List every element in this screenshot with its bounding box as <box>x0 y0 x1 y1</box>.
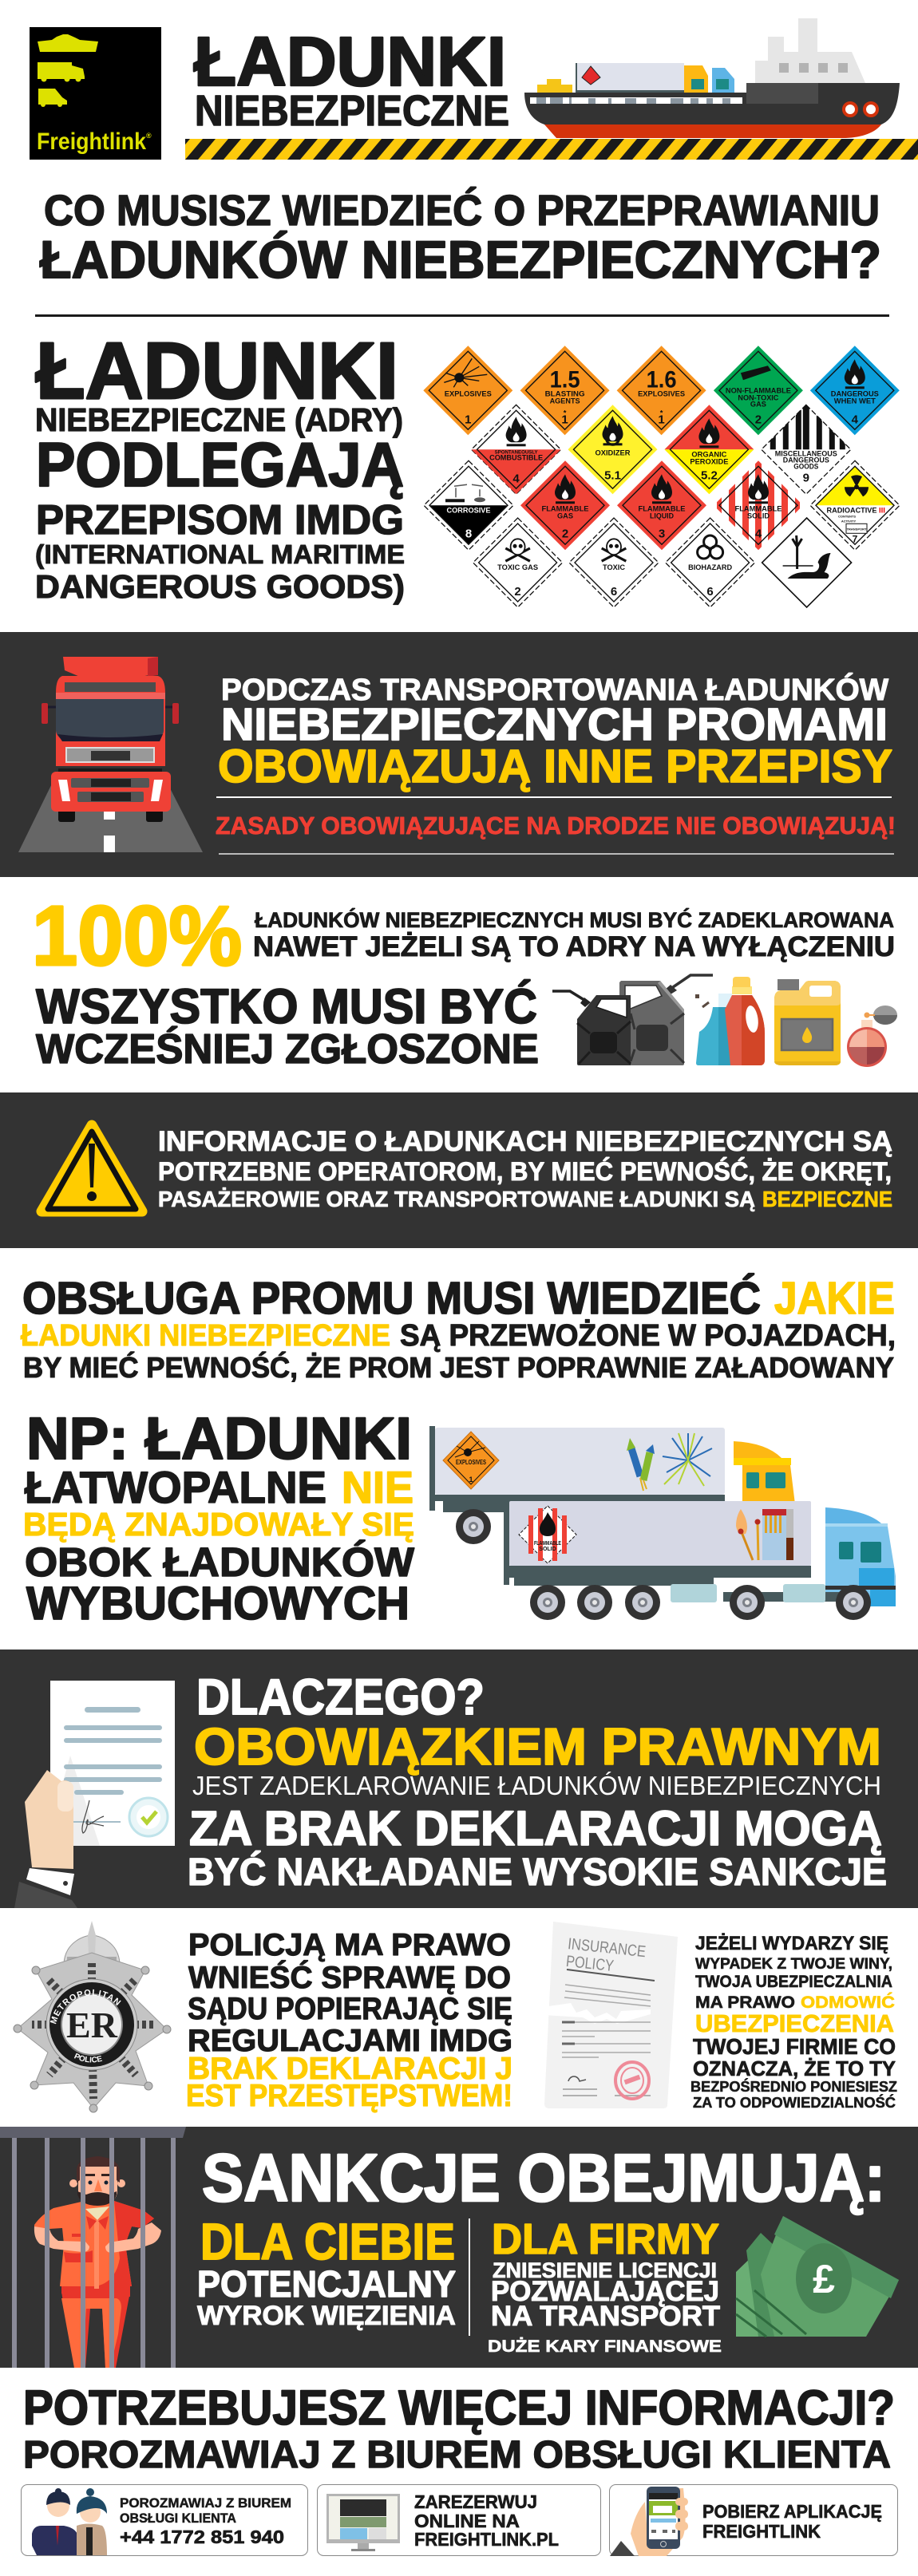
stat: 100% declared: ŁADUNKÓW NIEBEZPIECZNYCH MUSI BYĆ ZADEKLAROWANA <box>255 907 894 932</box>
icons: chemical containers <box>552 975 897 1067</box>
text: penalties for you: WYROK WIĘZIENIA <box>197 2301 456 2331</box>
truck: yellow with fireworks: 1 <box>469 1476 473 1484</box>
IMDG text block: (INTERNATIONAL MARITIME <box>35 540 405 570</box>
contact heading <box>23 2380 895 2476</box>
text: why information is needed: PASAŻEROWIE ORAZ TRANSPORTOWANE ŁADUNKI SĄ <box>158 1187 755 1211</box>
text: penalties for you: POTENCJALNY <box>197 2263 456 2305</box>
text: why declaration is mandatory <box>188 1669 887 1894</box>
text: insurer may refuse: ODMOWIĆ <box>801 1993 895 2012</box>
placard: miscellaneous: 9 <box>803 471 809 484</box>
placard: non-flammable gas: NON-TOXIC <box>738 393 779 402</box>
text: police may prosecute <box>186 1928 512 2113</box>
text: insurer may refuse: JEŻELI WYDARZY SIĘ <box>695 1933 888 1954</box>
text: insurer may refuse: MA PRAWO <box>695 1993 795 2012</box>
card: get the app <box>610 2485 897 2556</box>
placard: flammable solid: FLAMMABLE <box>734 504 782 513</box>
icon: fireworks <box>627 1433 712 1491</box>
text: phone contact: POROZMAWIAJ Z BIUREM <box>120 2495 291 2511</box>
placard: biohazard: BIOHAZARD <box>688 563 732 572</box>
placard: dangerous when wet: WHEN WET <box>834 397 876 405</box>
text: penalties for you <box>197 2213 456 2331</box>
text: insurer may refuse: OZNACZA, ŻE TO TY <box>693 2056 896 2080</box>
placard: miscellaneous: GOODS <box>793 462 818 471</box>
illustration: hand holding signed document <box>14 1681 175 1908</box>
placard: corrosive <box>424 460 513 550</box>
callout: road rules do not apply: ZASADY OBOWIĄZUJĄCE NA DRODZE NIE OBOWIĄZUJĄ! <box>216 812 896 840</box>
placard: explosives: EXPLOSIVES <box>445 389 492 398</box>
ship illustration <box>524 18 900 138</box>
text: example flammable and explosive: ŁATWOPALNE <box>25 1462 326 1512</box>
icon: perfume bottle <box>847 1006 897 1067</box>
icon: monitor <box>326 2494 400 2551</box>
placard: 1.6 explosives: 1.6 <box>647 366 677 393</box>
arms <box>34 2226 89 2252</box>
text: insurer may refuse <box>690 1933 897 2111</box>
placard: radioactive: CONTENTS <box>838 514 856 518</box>
placard: flammable gas <box>520 460 610 550</box>
icon: detergent bottle <box>725 977 765 1065</box>
placard: spontaneously combustible: COMBUSTIBLE <box>489 453 543 462</box>
title: NIEBEZPIECZNE <box>195 87 509 135</box>
card: book online <box>318 2485 600 2555</box>
placard: 1.5 blasting agents <box>520 346 610 435</box>
IMDG text block: PODLEGAJĄ <box>36 429 404 500</box>
placard: miscellaneous <box>762 401 851 494</box>
illustration: torn insurance policy <box>543 1922 678 2108</box>
text: police may prosecute: EST PRZESTĘPSTWEM! <box>186 2079 512 2113</box>
text: why declaration is mandatory: DLACZEGO? <box>196 1669 485 1725</box>
text: example flammable and explosive: OBOK ŁADUNKÓW <box>25 1539 415 1585</box>
placard: flammable gas: FLAMMABLE <box>541 504 589 513</box>
text: reserve online <box>414 2491 559 2550</box>
jail bars <box>0 2127 186 2368</box>
placard: organic peroxide: ORGANIC <box>691 450 727 459</box>
trousers <box>61 2292 130 2368</box>
text: ferry crew must know: BY MIEĆ PEWNOŚĆ, ŻE PROM JEST POPRAWNIE ZAŁADOWANY <box>23 1350 894 1384</box>
placard: spontaneously combustible <box>472 405 561 494</box>
icon: spray bottle <box>695 994 732 1065</box>
placard: flammable liquid <box>617 460 706 550</box>
placard: dangerous when wet: 4 <box>852 413 859 426</box>
panel: ferry rules <box>0 632 918 877</box>
text: penalties for companies <box>488 2215 722 2356</box>
logo: Freightlink <box>30 27 161 160</box>
text: penalties for companies: DLA FIRMY <box>492 2215 719 2263</box>
placard: flammable liquid: FLAMMABLE <box>639 504 685 513</box>
text: insurer may refuse: ZA TO ODPOWIEDZIALNOŚĆ <box>693 2094 896 2111</box>
icon: oil canister <box>774 979 841 1065</box>
placard: 1.6 explosives: * <box>660 409 663 417</box>
text: why declaration is mandatory: JEST ZADEKLAROWANIE ŁADUNKÓW NIEBEZPIECZNYCH <box>192 1771 881 1800</box>
placard: non-flammable gas <box>714 346 803 435</box>
icon: metropolitan police badge: POLICE <box>73 2053 102 2062</box>
placard: organic peroxide: 5.2 <box>701 468 718 482</box>
text: police may prosecute: BRAK DEKLARACJI J <box>188 2052 512 2086</box>
icon: matches <box>736 1509 793 1560</box>
icon: phone in hand <box>610 2487 688 2556</box>
icon: banknotes: £ <box>813 2257 835 2301</box>
shirt <box>34 2201 154 2286</box>
text: penalties for companies: POZWALAJĄCEJ <box>491 2276 719 2307</box>
placard: explosives <box>423 346 512 435</box>
text: insurer may refuse: UBEZPIECZENIA <box>695 2009 894 2037</box>
placard: non-flammable gas: 2 <box>755 413 762 426</box>
text: download app: POBIERZ APLIKACJĘ <box>702 2501 882 2522</box>
placard: biohazard: 6 <box>706 585 714 599</box>
subtitle <box>40 187 881 289</box>
placard: 1.6 explosives <box>617 346 706 435</box>
placard: toxic: TOXIC <box>603 563 625 572</box>
text: police may prosecute: WNIEŚĆ SPRAWĘ DO <box>188 1960 511 1995</box>
heading: penalties include: SANKCJE OBEJMUJĄ: <box>202 2140 885 2215</box>
placard: flammable solid <box>717 460 800 551</box>
stat: 100% declared <box>32 889 895 983</box>
text: ferry crew must know: SĄ PRZEWOŻONE W POJAZDACH, <box>400 1319 896 1353</box>
title: ŁADUNKI <box>194 23 506 101</box>
icon: banknotes <box>736 2216 899 2337</box>
placard: explosives: 1 <box>465 413 471 426</box>
truck: blue with matches: FLAMMABLE <box>534 1541 561 1547</box>
placard: 1.5 blasting agents: 1 <box>561 413 568 426</box>
text: police may prosecute: POLICJĄ MA PRAWO <box>188 1928 511 1962</box>
placard: toxic <box>569 518 659 607</box>
placard: flammable liquid: 3 <box>659 527 665 540</box>
icon: grey jerry can <box>619 975 713 1065</box>
placard: radioactive: RADIOACTIVE <box>827 506 876 515</box>
placard: non-flammable gas: NON-FLAMMABLE <box>726 386 791 395</box>
placard: corrosive: CORROSIVE <box>447 506 490 515</box>
text: ferry crew must know: OBSŁUGA PROMU MUSI WIEDZIEĆ <box>22 1273 761 1324</box>
text: download app: FREIGHTLINK <box>702 2521 821 2542</box>
placard: radioactive: 7 <box>853 533 858 544</box>
text: reserve online: ZAREZERWUJ <box>414 2491 537 2512</box>
text: why information is needed <box>158 1125 892 1211</box>
placard: oxidizer <box>568 405 658 494</box>
icon: metropolitan police badge <box>13 1922 171 2113</box>
icon: metropolitan police badge: ER <box>66 2005 118 2045</box>
placard: corrosive: 8 <box>465 527 472 540</box>
placard: environmental hazard <box>762 518 852 607</box>
title <box>194 23 509 135</box>
text: phone contact: OBSŁUGI KLIENTA <box>120 2511 236 2526</box>
text: ferry crew must know: ŁADUNKI NIEBEZPIECZNE <box>21 1319 390 1353</box>
text: ferry crew must know <box>21 1273 896 1384</box>
placard: dangerous when wet <box>810 346 900 435</box>
subtitle: ŁADUNKÓW NIEBEZPIECZNYCH? <box>40 230 881 289</box>
stat: 100% declared: 100% <box>32 889 242 983</box>
heading: ferry rules text: PODCZAS TRANSPORTOWANIA ŁADUNKÓW <box>221 672 888 707</box>
placard: oxidizer: OXIDIZER <box>596 448 631 457</box>
placard: toxic gas: TOXIC GAS <box>497 563 538 572</box>
placard: toxic gas: 2 <box>514 585 521 599</box>
head <box>69 2179 77 2187</box>
placard: toxic: 6 <box>611 585 617 599</box>
IMDG text block: NIEBEZPIECZNE (ADRY) <box>35 401 403 438</box>
text: everything must be declared: WSZYSTKO MUSI BYĆ <box>36 979 537 1033</box>
text: example flammable and explosive: WYBUCHOWYCH <box>26 1578 410 1630</box>
truck: blue with matches <box>504 1499 896 1620</box>
illustration: torn insurance policy: INSURANCE <box>567 1935 647 1961</box>
placard: radioactive: TRANSPORT <box>847 527 867 531</box>
placard: dangerous when wet: DANGEROUS <box>831 389 879 398</box>
text: download app <box>702 2501 882 2542</box>
text: reserve online: ONLINE NA <box>414 2511 520 2531</box>
placard: flammable solid: 4 <box>755 527 762 540</box>
text: insurer may refuse: TWOJEJ FIRMIE CO <box>693 2034 896 2059</box>
text: example flammable and explosive: NP: ŁADUNKI <box>26 1405 412 1472</box>
text: example flammable and explosive <box>23 1405 415 1630</box>
logo: Freightlink: ® <box>146 132 152 140</box>
stat: 100% declared: NAWET JEŻELI SĄ TO ADRY NA WYŁĄCZENIU <box>253 930 895 962</box>
truck: yellow with fireworks <box>429 1426 795 1544</box>
icon: customer service staff <box>32 2488 107 2555</box>
text: police may prosecute: REGULACJAMI IMDG <box>188 2024 512 2058</box>
placard: spontaneously combustible: 4 <box>512 472 520 485</box>
text: ferry crew must know: JAKIE <box>774 1273 895 1324</box>
text: phone contact: +44 1772 851 940 <box>120 2527 284 2547</box>
panel: penalties <box>0 2127 918 2368</box>
placard: radioactive: ACTIVITY <box>841 519 856 523</box>
text: example flammable and explosive: BĘDĄ ZNAJDOWAŁY SIĘ <box>23 1506 414 1543</box>
text: example flammable and explosive: NIE <box>342 1462 413 1512</box>
placard: flammable gas: GAS <box>557 512 573 520</box>
placard: radioactive <box>810 460 900 550</box>
placard: miscellaneous: MISCELLANEOUS <box>775 449 837 458</box>
placard: 1.6 explosives: EXPLOSIVES <box>638 389 685 398</box>
placard: organic peroxide: PEROXIDE <box>690 457 728 466</box>
placard: toxic gas <box>473 518 563 607</box>
illustration: red truck <box>42 657 179 822</box>
illustration: road <box>18 782 203 852</box>
illustration: two trucks <box>429 1426 896 1620</box>
text: penalties for companies: DUŻE KARY FINANSOWE <box>488 2337 722 2356</box>
text: why declaration is mandatory: BYĆ NAKŁADANE WYSOKIE SANKCJE <box>188 1850 887 1894</box>
header <box>30 18 918 160</box>
text: why information is needed: POTRZEBNE OPERATOROM, BY MIEĆ PEWNOŚĆ, ŻE OKRĘT, <box>158 1157 892 1186</box>
panel: why declare <box>0 1650 918 1908</box>
text: penalties for you: DLA CIEBIE <box>200 2213 455 2270</box>
placard: oxidizer: 5.1 <box>604 468 621 482</box>
placard: spontaneously combustible: SPONTANEOUSLY <box>495 450 538 455</box>
illustration: prisoner behind bars <box>0 2127 186 2368</box>
placard: flammable solid: SOLID <box>747 512 770 520</box>
icon: metropolitan police badge: METROPOLITAN <box>49 1989 121 2024</box>
text: insurer may refuse: TWOJA UBEZPIECZALNIA <box>695 1973 892 1991</box>
heading: ferry rules text: NIEBEZPIECZNYCH PROMAMI <box>221 699 888 750</box>
text: police may prosecute: SĄDU POPIERAJĄC SIĘ <box>188 1992 512 2026</box>
placard: flammable gas: 2 <box>562 527 568 540</box>
contact heading: POROZMAWIAJ Z BIUREM OBSŁUGI KLIENTA <box>23 2434 891 2476</box>
placard: 1.6 explosives: 1 <box>658 413 665 426</box>
heading: ferry rules text: OBOWIĄZUJĄ INNE PRZEPISY <box>218 741 892 792</box>
placard: 1.5 blasting agents: BLASTING <box>545 389 585 398</box>
placard: 1.5 blasting agents: 1.5 <box>550 366 580 393</box>
heading: ferry rules text <box>218 672 892 792</box>
IMDG text block: DANGEROUS GOODS) <box>35 568 405 605</box>
logo: Freightlink: Freightlink <box>37 128 146 155</box>
placard: 1.5 blasting agents: AGENTS <box>550 397 580 405</box>
hazard stripe <box>185 139 918 160</box>
truck: blue with matches: SOLID <box>539 1547 556 1552</box>
illustration: torn insurance policy: POLICY <box>565 1953 615 1975</box>
panel: safety information <box>0 1092 918 1248</box>
icon: warning triangle <box>42 1125 142 1211</box>
placard: biohazard <box>666 518 755 607</box>
text: everything must be declared <box>36 979 539 1073</box>
text: why declaration is mandatory: OBOWIĄZKIEM PRAWNYM <box>194 1717 881 1776</box>
IMDG text block <box>35 326 405 605</box>
placard: flammable liquid: LIQUID <box>650 512 674 520</box>
placard: miscellaneous: DANGEROUS <box>783 456 829 464</box>
text: insurer may refuse: BEZPOŚREDNIO PONIESIESZ <box>690 2078 897 2095</box>
subtitle: CO MUSISZ WIEDZIEĆ O PRZEPRAWIANIU <box>44 187 880 235</box>
placard: radioactive: III <box>879 506 885 515</box>
text: penalties for companies: NA TRANSPORT <box>491 2301 720 2332</box>
text: insurer may refuse: WYPADEK Z TWOJE WINY, <box>695 1955 892 1973</box>
text: why information is needed: INFORMACJE O ŁADUNKACH NIEBEZPIECZNYCH SĄ <box>158 1125 892 1157</box>
placard: 1.5 blasting agents: * <box>564 409 567 417</box>
truck: yellow with fireworks: EXPLOSIVES <box>456 1459 486 1466</box>
IMDG text block: ŁADUNKI <box>36 326 398 416</box>
text: everything must be declared: WCZEŚNIEJ ZGŁOSZONE <box>36 1026 539 1073</box>
text: reserve online: FREIGHTLINK.PL <box>414 2529 559 2550</box>
icon: black jerry can <box>552 991 631 1065</box>
text: phone contact <box>120 2495 291 2547</box>
text: why information is needed: BEZPIECZNE <box>762 1187 892 1211</box>
placard: organic peroxide <box>664 405 754 494</box>
card: customer service <box>21 2485 308 2555</box>
text: penalties for companies: ZNIESIENIE LICENCJI <box>493 2258 717 2282</box>
placard: non-flammable gas: GAS <box>750 400 766 409</box>
text: why declaration is mandatory: ZA BRAK DEKLARACJI MOGĄ <box>189 1801 882 1855</box>
IMDG text block: PRZEPISOM IMDG <box>36 497 404 543</box>
hazard placards <box>423 346 900 607</box>
